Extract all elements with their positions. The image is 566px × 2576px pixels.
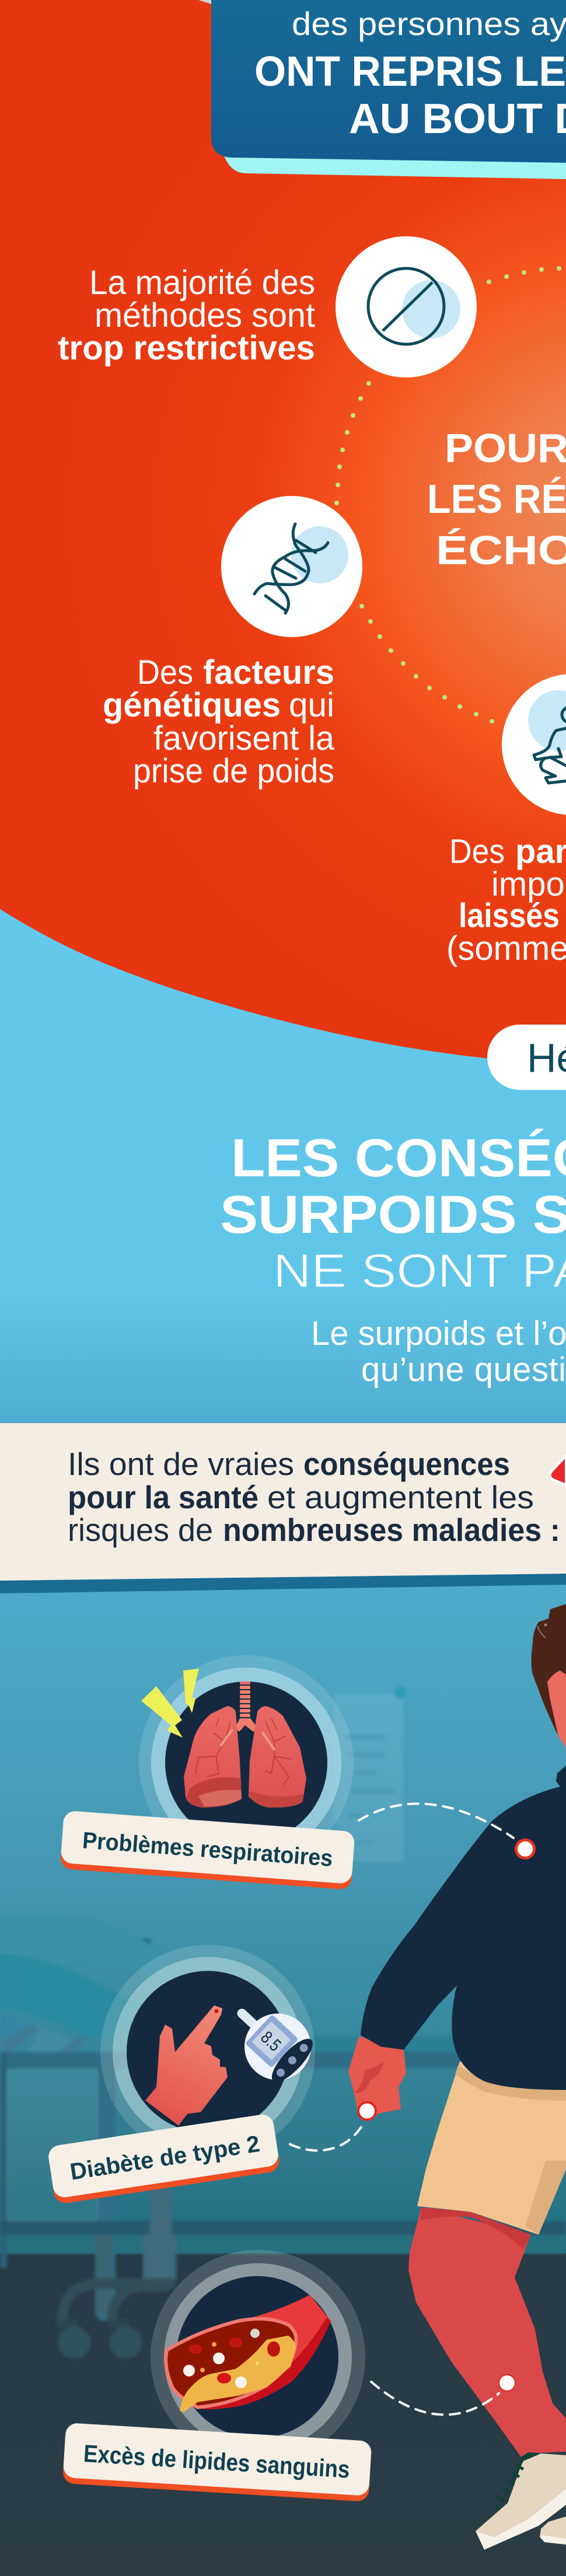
text: restrictive methods <box>58 264 315 367</box>
text: genetic factors: qui <box>289 686 334 724</box>
pill tag <box>487 1025 566 1090</box>
text: genetic factors: favorisent la <box>153 719 335 757</box>
label: type 2 diabetes <box>47 2113 281 2205</box>
text: genetic factors: prise de poids <box>133 752 334 790</box>
panel: intro band <box>0 1423 566 1593</box>
connector: diabetes to hand <box>290 2101 377 2151</box>
text: neglected parameters: impo <box>491 865 565 903</box>
heading: why diets fail: POUR <box>445 425 566 471</box>
connector: lipids to leg <box>371 2374 516 2415</box>
background: hospital wall <box>0 1585 566 2253</box>
text: genetic factors: Des <box>137 653 193 691</box>
text: genetic factors: génétiques <box>103 686 281 724</box>
hand pricking finger <box>145 2005 228 2126</box>
text: intro: Ils ont de vraies <box>68 1446 294 1482</box>
text: restrictive methods: méthodes sont <box>95 296 315 334</box>
icon: crossed-out pill <box>336 236 477 378</box>
background: blue section <box>0 875 566 1429</box>
medallion: lungs <box>139 1655 354 1870</box>
icon: red arrow tip <box>550 1456 566 1485</box>
callout: blue statistic box <box>198 0 566 179</box>
shoes <box>476 2452 566 2550</box>
leg <box>408 2207 566 2457</box>
text: neglected parameters: Des <box>449 833 505 871</box>
heading: consequences of overweight <box>220 1128 566 1298</box>
panel: orange-red section with curved bottom <box>0 0 566 1065</box>
text: subheading <box>311 1315 566 1389</box>
text: restrictive methods: trop restrictives <box>58 329 315 367</box>
glucose meter: 8.5 <box>257 2028 285 2056</box>
label: excess blood lipids: Excès de lipides sanguins <box>83 2439 351 2483</box>
hand <box>348 2036 406 2120</box>
dotted connector ring <box>334 266 561 723</box>
callout: blue statistic box: des personnes ay <box>292 5 566 42</box>
label: type 2 diabetes: Diabète de type 2 <box>68 2131 261 2185</box>
heading: why diets fail <box>427 425 566 573</box>
label: respiratory problems <box>60 1810 355 1890</box>
trachea <box>235 1682 258 1732</box>
medallion: blood lipids <box>151 2250 365 2465</box>
icon: meditating figure <box>502 674 566 815</box>
text: intro <box>68 1446 560 1548</box>
text: intro: et augmentent les <box>267 1479 534 1515</box>
lightning bolts <box>141 1669 199 1738</box>
text: intro: risques de <box>68 1512 213 1548</box>
text: genetic factors <box>103 653 335 790</box>
sweater <box>361 1766 566 2090</box>
right lung <box>249 1706 306 1808</box>
head <box>531 1604 566 1747</box>
text: intro: pour la santé <box>68 1479 258 1515</box>
shorts <box>417 2061 566 2235</box>
text: intro: conséquences <box>303 1446 510 1482</box>
figure: man with overweight <box>348 1604 566 2550</box>
label: excess blood lipids <box>62 2423 372 2502</box>
left lung <box>184 1706 242 1808</box>
connector: lungs to chest <box>359 1803 536 1860</box>
background: hospital floor <box>0 2253 566 2576</box>
medallion: diabetes <box>100 1945 315 2135</box>
label: respiratory problems: Problèmes respiratoires <box>82 1827 334 1872</box>
glucose meter <box>216 1986 325 2094</box>
text: neglected parameters <box>446 833 566 967</box>
text: neglected parameters: (somme <box>446 929 566 967</box>
text: restrictive methods: La majorité des <box>89 264 315 302</box>
background: hospital bed <box>0 1915 566 2359</box>
heading: consequences of overweight: NE SONT PA <box>273 1245 566 1298</box>
artery <box>202 2295 331 2409</box>
icon: DNA helix <box>221 496 362 637</box>
text: genetic factors: facteurs <box>203 653 334 691</box>
background: wall document <box>334 1686 407 1861</box>
